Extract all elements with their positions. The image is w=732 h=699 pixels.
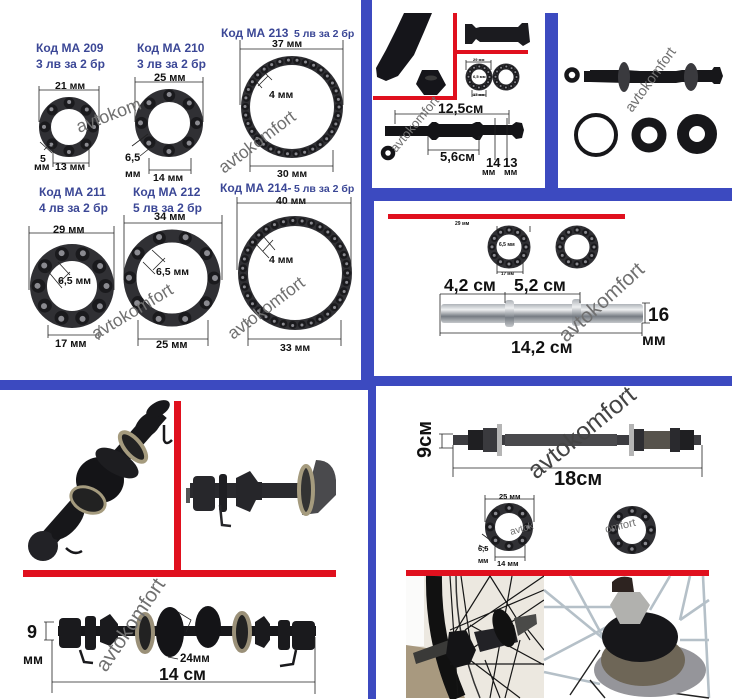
- axle with dimensions: 5,6см: [440, 149, 475, 164]
- bearing MA 210: 6,5: [125, 152, 140, 164]
- axle with dimensions: 12,5см: [438, 100, 483, 116]
- photo: spindle end with cup: [376, 13, 446, 95]
- axle photo: [453, 424, 701, 456]
- watermarks: avtokomfort: [214, 106, 300, 177]
- bearing MA 210: 14 мм: [153, 172, 183, 184]
- bearing with dimensions: 25 мм: [499, 492, 521, 501]
- dimensions: мм: [642, 332, 666, 349]
- bearing MA 213: [221, 26, 354, 180]
- red dividers: [23, 401, 336, 577]
- bearing MA 209: 13 мм: [55, 161, 85, 173]
- bearing MA 213: 4 мм: [269, 89, 294, 101]
- axle dimensions: [414, 421, 702, 490]
- bearing MA 209: [34, 41, 105, 173]
- axle dimensions: 9см: [414, 421, 436, 458]
- bearing MA 213: Код МА 213: [221, 26, 289, 40]
- silver axle: [441, 299, 643, 327]
- photo: axle side view with cone: [186, 460, 336, 526]
- watermarks: avtokomfort: [91, 574, 170, 676]
- axle with dimensions: мм: [504, 167, 518, 177]
- bearing with dimensions: 6,5: [478, 544, 488, 553]
- bearing MA 211: 4 лв за 2 бр: [39, 201, 108, 215]
- dimensions: [440, 275, 669, 357]
- washer: [636, 122, 662, 148]
- bearing MA 214: Код МА 214-: [220, 181, 291, 195]
- bearing MA 214: 33 мм: [280, 342, 310, 354]
- bearing MA 209: мм: [34, 161, 50, 173]
- photo: assembled axle with dimensions: 9: [27, 622, 37, 642]
- mini bearing: [560, 230, 594, 264]
- photo: assembled axle with dimensions: [23, 606, 316, 694]
- panel: silver axle: [388, 214, 669, 357]
- bearing MA 211: [29, 185, 114, 350]
- bearing MA 211: Код МА 211: [39, 185, 106, 199]
- bearing MA 210: 25 мм: [154, 72, 186, 84]
- watermarks: avtokom: [73, 94, 144, 137]
- bearing MA 210: 3 лв за 2 бр: [137, 57, 206, 71]
- bearing MA 214: 5 лв за 2 бр: [294, 183, 354, 195]
- mini bearing with dimensions: [466, 57, 491, 97]
- dimensions: 5,2 см: [514, 275, 566, 295]
- panel: bearing catalogue: [29, 26, 354, 354]
- bearing MA 211: 6,5 мм: [58, 275, 91, 287]
- watermarks: avtokomfort: [223, 272, 309, 343]
- mini bearing: [496, 66, 516, 88]
- bearing MA 212: Код МА 212: [133, 185, 201, 199]
- mini bearing with dimensions: 29 мм: [473, 57, 485, 62]
- bearing MA 212: 25 мм: [156, 339, 188, 351]
- bearing MA 213: 5 лв за 2 бр: [294, 28, 354, 40]
- axle with dimensions: [383, 100, 524, 177]
- bearing MA 212: 5 лв за 2 бр: [133, 201, 202, 215]
- bearing MA 212: [124, 185, 222, 351]
- bearing MA 214: 4 мм: [269, 254, 294, 266]
- washer large: [683, 120, 711, 148]
- bearing MA 211: 17 мм: [55, 338, 87, 350]
- mini bearing with dimensions: 6,5 мм: [473, 74, 486, 79]
- watermarks: omfort: [604, 517, 637, 536]
- photo: assembled axle with dimensions: мм: [23, 652, 43, 667]
- dimensions: 4,2 см: [444, 275, 496, 295]
- bearing MA 212: 34 мм: [154, 211, 186, 223]
- bearing MA 210: Код МА 210: [137, 41, 205, 55]
- red divider: [406, 570, 709, 576]
- dimensions: 16: [648, 305, 669, 326]
- watermarks: avtokomfort: [554, 258, 649, 347]
- bearing MA 214: 40 мм: [276, 195, 306, 207]
- axle with dimensions: мм: [482, 167, 496, 177]
- bearing MA 209: 21 мм: [55, 80, 85, 92]
- panel: bottom bracket axle: [373, 13, 530, 177]
- bearing MA 213: 37 мм: [272, 38, 302, 50]
- photo: spindle side view: [465, 23, 530, 46]
- mini bearing with dimensions: 17 мм: [501, 271, 515, 276]
- bearing MA 209: 5: [40, 153, 46, 165]
- watermarks: [73, 45, 680, 676]
- bearing MA 210: [125, 41, 206, 184]
- photo: axle disassembled diagonal: [28, 396, 173, 561]
- mini bearing with dimensions: 17 мм: [473, 92, 485, 97]
- panel: spindle with lock rings: [566, 62, 723, 155]
- bearing MA 209: Код МА 209: [36, 41, 104, 55]
- bearing MA 209: 3 лв за 2 бр: [36, 57, 105, 71]
- watermarks: avtokomfort: [387, 93, 442, 155]
- watermarks: avtokomfort: [88, 279, 177, 343]
- bearing MA 212: 6,5 мм: [156, 266, 189, 278]
- axle dimensions: 18см: [554, 468, 602, 490]
- watermarks: avtokomfort: [522, 381, 641, 485]
- photo: assembled axle with dimensions: 14 см: [159, 664, 206, 684]
- red dividers: [373, 13, 528, 100]
- photo: wheel hub with rim: [406, 576, 544, 698]
- watermarks: avtokomfort: [622, 45, 680, 115]
- bearing with dimensions: [478, 492, 534, 568]
- photo: wheel hub close-up: [544, 576, 709, 698]
- axle with dimensions: 13: [503, 155, 517, 170]
- mini bearing with dimensions: 29 мм: [455, 221, 470, 227]
- bearing MA 210: мм: [125, 168, 141, 180]
- photo: assembled axle with dimensions: 24мм: [180, 653, 210, 665]
- lock ring: [576, 115, 616, 155]
- bearing with dimensions: мм: [478, 558, 488, 565]
- panel: hub axle: [406, 421, 709, 698]
- bearing: [613, 511, 651, 549]
- bearing MA 214: [220, 181, 354, 354]
- watermarks: avtok: [509, 520, 536, 538]
- spindle with cups: [566, 62, 723, 92]
- mini bearing with dimensions: 6,5 мм: [499, 242, 515, 248]
- dimensions: 14,2 см: [511, 337, 573, 357]
- axle with dimensions: 14: [486, 155, 501, 170]
- red divider: [388, 214, 625, 219]
- bearing MA 213: 30 мм: [277, 168, 307, 180]
- mini bearing with dimensions: [455, 221, 530, 276]
- bearing with dimensions: 14 мм: [497, 559, 519, 568]
- bearing MA 211: 29 мм: [53, 224, 85, 236]
- panel: wheel axle with cones: [23, 396, 336, 694]
